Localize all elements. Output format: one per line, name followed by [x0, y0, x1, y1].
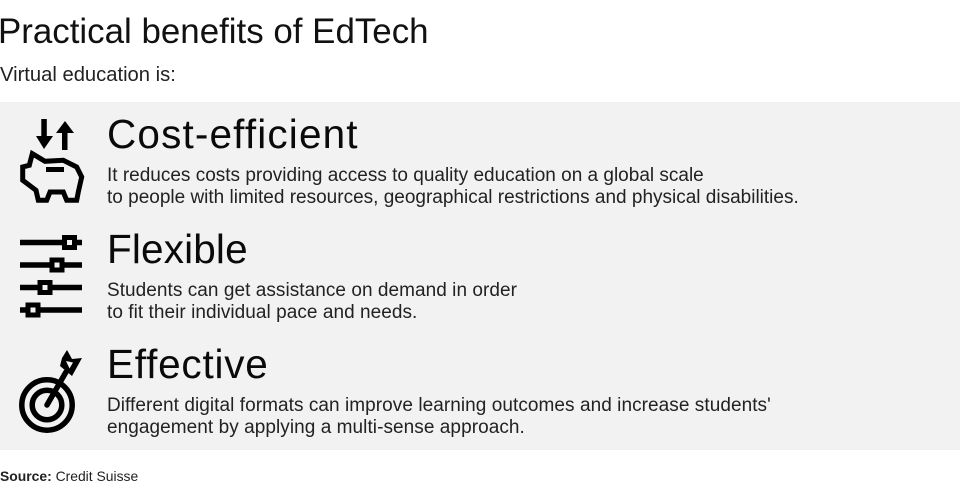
panel: benefits: [0, 102, 960, 450]
heading: flexible: Flexible: [107, 226, 248, 272]
icon: target with arrow: [19, 350, 82, 433]
text: effective description: [107, 395, 771, 438]
text: flexible description: to fit their individual pace and needs.: [107, 302, 417, 323]
icon: sliders: [20, 235, 82, 318]
icon: piggy bank with arrows: [20, 119, 84, 203]
title: Practical benefits of EdTech: [0, 12, 429, 51]
text: flexible description: Students can get assistance on demand in order: [107, 280, 517, 301]
text: effective description: engagement by applying a multi-sense approach.: [107, 417, 525, 438]
text: cost-efficient description: to people with limited resources, geographical restrictions and physical disabilities.: [107, 187, 799, 208]
text: flexible description: [107, 280, 517, 323]
subtitle: Virtual education is:: [0, 64, 176, 86]
heading: cost-efficient: Cost-efficient: [107, 111, 359, 157]
text: cost-efficient description: It reduces costs providing access to quality education on a global scale: [107, 165, 704, 186]
text: cost-efficient description: [107, 165, 799, 208]
source note: Source: Credit Suisse: [0, 468, 138, 484]
text: effective description: Different digital formats can improve learning outcomes and increase students': [107, 395, 771, 416]
heading: effective: Effective: [107, 341, 269, 387]
